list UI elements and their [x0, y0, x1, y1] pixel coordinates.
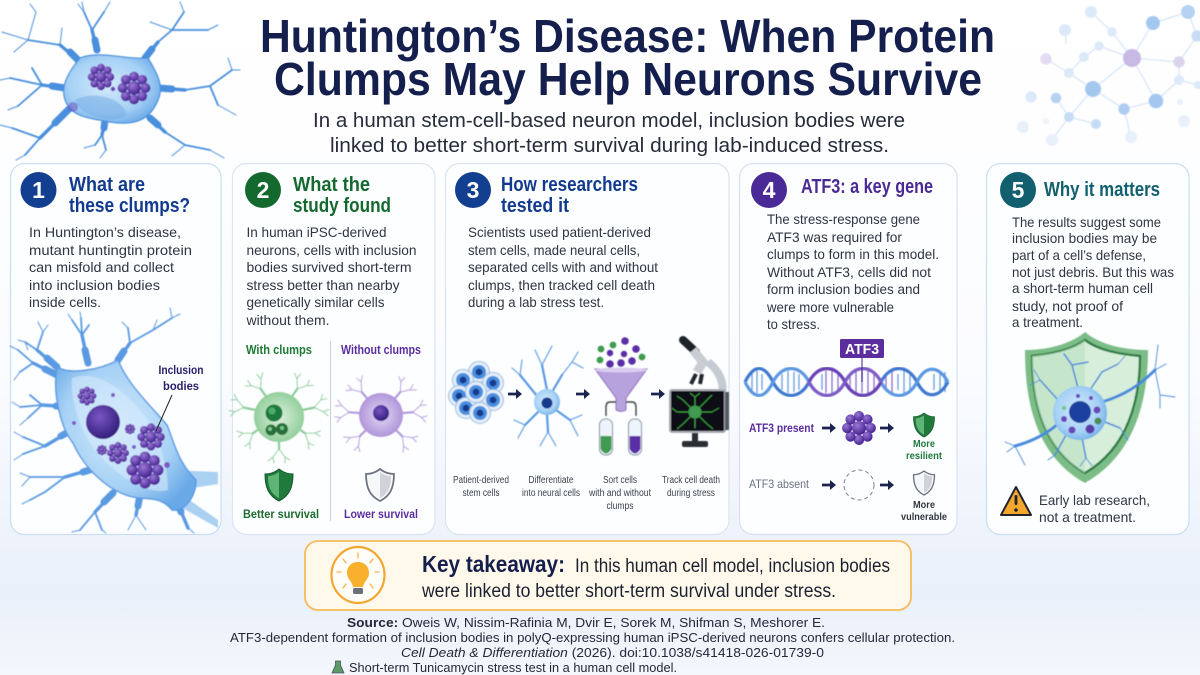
heading 2: What the [293, 174, 370, 196]
body text 3 [468, 224, 658, 310]
body text 4: were more vulnerable [766, 299, 894, 315]
source citation: ATF3-dependent formation of inclusion bodies in polyQ-expressing human iPSC-derived neurons confers cellular protection. [230, 630, 955, 645]
row: ATF3 absent [749, 470, 947, 523]
illustration: molecule network top right [1017, 5, 1200, 146]
takeaway text: were linked to better short-term survival under stress. [421, 581, 836, 602]
illustration: neuron with inclusion bodies [10, 308, 218, 533]
body text 2: neurons, cells with inclusion [246, 242, 416, 258]
icon: sorting funnel with tubes [595, 337, 647, 455]
step captions: with and without [588, 488, 651, 499]
arrow 2 [576, 389, 590, 399]
body text 5: part of a cell’s defense, [1012, 247, 1146, 263]
title [260, 10, 995, 105]
body text 1: inside cells. [29, 294, 101, 310]
key takeaway callout [305, 541, 911, 610]
panel 1: what are these clumps [10, 164, 221, 534]
step captions [453, 475, 720, 512]
body text 2: bodies survived short-term [246, 259, 412, 275]
takeaway text: In this human cell model, inclusion bodies [575, 556, 890, 577]
number badge 5: 5 [1012, 177, 1025, 203]
row: ATF3 present: resilient [906, 450, 942, 462]
panel 4: ATF3 a key gene [740, 164, 957, 534]
title: Clumps May Help Neurons Survive [274, 53, 982, 105]
arrow 3 [651, 389, 665, 399]
source citation [230, 615, 955, 660]
body text 5: not just debris. But this was [1012, 264, 1174, 280]
body text 1: mutant huntingtin protein [29, 242, 192, 258]
heading 2: study found [293, 195, 391, 217]
heading 2 [293, 174, 391, 217]
body text 2: In human iPSC-derived [246, 224, 386, 240]
number badge 4 [751, 172, 787, 208]
number badge 2 [245, 172, 281, 208]
illustration: DNA helix [745, 368, 948, 396]
row: ATF3 absent: ATF3 absent [749, 477, 810, 491]
illustration: shield protecting neuron [1005, 332, 1175, 483]
body text 2: genetically similar cells [246, 294, 384, 310]
body text 3: stem cells, made neural cells, [468, 242, 640, 258]
step captions: Differentiate [528, 475, 574, 486]
label: better survival: Better survival [243, 507, 319, 521]
icon: green shield [265, 469, 293, 501]
body text 1: can misfold and collect [29, 259, 174, 275]
number badge 4: 4 [763, 177, 776, 203]
number badge 1 [20, 172, 56, 208]
body text 1: In Huntington’s disease, [29, 224, 181, 240]
icon: grey shield [366, 469, 394, 501]
label: with clumps: With clumps [246, 343, 312, 357]
warning note: Early lab research, [1039, 492, 1150, 508]
step captions: Sort cells [603, 475, 637, 486]
icon: lightbulb [332, 547, 384, 603]
body text 4: Without ATF3, cells did not [767, 264, 931, 280]
body text 4: ATF3 was required for [767, 229, 902, 245]
source citation: Cell Death & Differentiation (2026). doi:10.1038/s41418-026-01739-0 [401, 645, 824, 660]
panel 5: why it matters [986, 164, 1189, 534]
study note: Short-term Tunicamycin stress test in a human cell model. [349, 660, 677, 675]
body text 4: to stress. [767, 316, 820, 332]
illustration: green neuron with clumps [228, 371, 330, 463]
body text 5: The results suggest some [1012, 214, 1161, 230]
icon: stem cell cluster [448, 362, 504, 424]
illustration: neuron top left [0, 2, 240, 160]
step captions: Track cell death [662, 475, 720, 486]
heading 3: How researchers [501, 174, 638, 196]
subtitle: In a human stem-cell-based neuron model, inclusion bodies were [313, 110, 905, 132]
number badge 3: 3 [467, 177, 479, 203]
ATF3 gene tag: ATF3 [845, 341, 879, 358]
body text 5: inclusion bodies may be [1012, 230, 1157, 246]
title: Huntington’s Disease: When Protein [260, 10, 995, 62]
body text 4: The stress-response gene [767, 211, 920, 227]
body text 2: stress better than nearby [246, 277, 400, 293]
step captions: during stress [667, 488, 715, 499]
callout: inclusion bodies [156, 365, 204, 431]
takeaway text [421, 551, 890, 602]
heading 1 [69, 174, 190, 217]
body text 2 [246, 224, 416, 328]
row: ATF3 absent: More [913, 499, 935, 511]
heading 4: ATF3: a key gene [801, 176, 933, 198]
step captions: stem cells [462, 488, 500, 499]
subtitle: linked to better short-term survival during lab-induced stress. [330, 135, 889, 157]
row: ATF3 present: ATF3 present [749, 421, 814, 435]
arrow 1 [508, 389, 522, 399]
body text 3: during a lab stress test. [468, 294, 604, 310]
label: lower survival: Lower survival [344, 507, 418, 521]
takeaway text: Key takeaway: [422, 551, 565, 577]
callout: inclusion bodies: Inclusion [158, 365, 204, 377]
number badge 2: 2 [257, 177, 269, 203]
step captions: Patient-derived [453, 475, 509, 486]
body text 3: clumps, then tracked cell death [468, 277, 655, 293]
warning note [1039, 492, 1150, 525]
heading 1: What are [69, 174, 145, 196]
step captions: clumps [606, 501, 634, 512]
body text 1: into inclusion bodies [29, 277, 160, 293]
row: ATF3 present: More [913, 438, 935, 450]
warning note: not a treatment. [1039, 509, 1136, 525]
number badge 1: 1 [32, 177, 45, 203]
ATF3 gene tag [840, 339, 884, 382]
body text 4: clumps to form in this model. [767, 246, 939, 262]
heading 1: these clumps? [69, 195, 190, 217]
icon: flask [332, 661, 344, 673]
body text 2: without them. [246, 312, 330, 328]
heading 3: tested it [501, 195, 569, 217]
body text 4 [766, 211, 939, 332]
icon: microscope and monitor [670, 340, 729, 447]
number badge 5 [1000, 172, 1036, 208]
panel 3: how researchers tested it [446, 164, 729, 534]
body text 4: form inclusion bodies and [767, 281, 920, 297]
body text 3: Scientists used patient-derived [468, 224, 651, 240]
heading 3 [501, 174, 638, 217]
body text 5: study, not proof of [1012, 298, 1123, 314]
body text 3: separated cells with and without [468, 259, 658, 275]
callout: inclusion bodies: bodies [163, 381, 199, 393]
illustration: purple neuron without clumps [334, 374, 428, 454]
body text 5: a treatment. [1012, 314, 1083, 330]
subtitle [313, 110, 905, 157]
panel 2: what the study found [228, 164, 435, 534]
icon: neural cell [512, 346, 583, 446]
body text 5 [1012, 214, 1174, 330]
row: ATF3 absent: vulnerable [901, 511, 947, 523]
heading 5: Why it matters [1044, 179, 1160, 201]
body text 5: a short-term human cell [1012, 280, 1153, 296]
number badge 3 [455, 172, 491, 208]
body text 1 [29, 224, 192, 310]
label: without clumps: Without clumps [341, 343, 421, 357]
icon: warning triangle [1001, 487, 1031, 515]
step captions: into neural cells [522, 488, 580, 499]
source citation: Source: Oweis W, Nissim-Rafinia M, Dvir E, Sorek M, Shifman S, Meshorer E. [347, 615, 825, 630]
row: ATF3 present [749, 411, 942, 462]
